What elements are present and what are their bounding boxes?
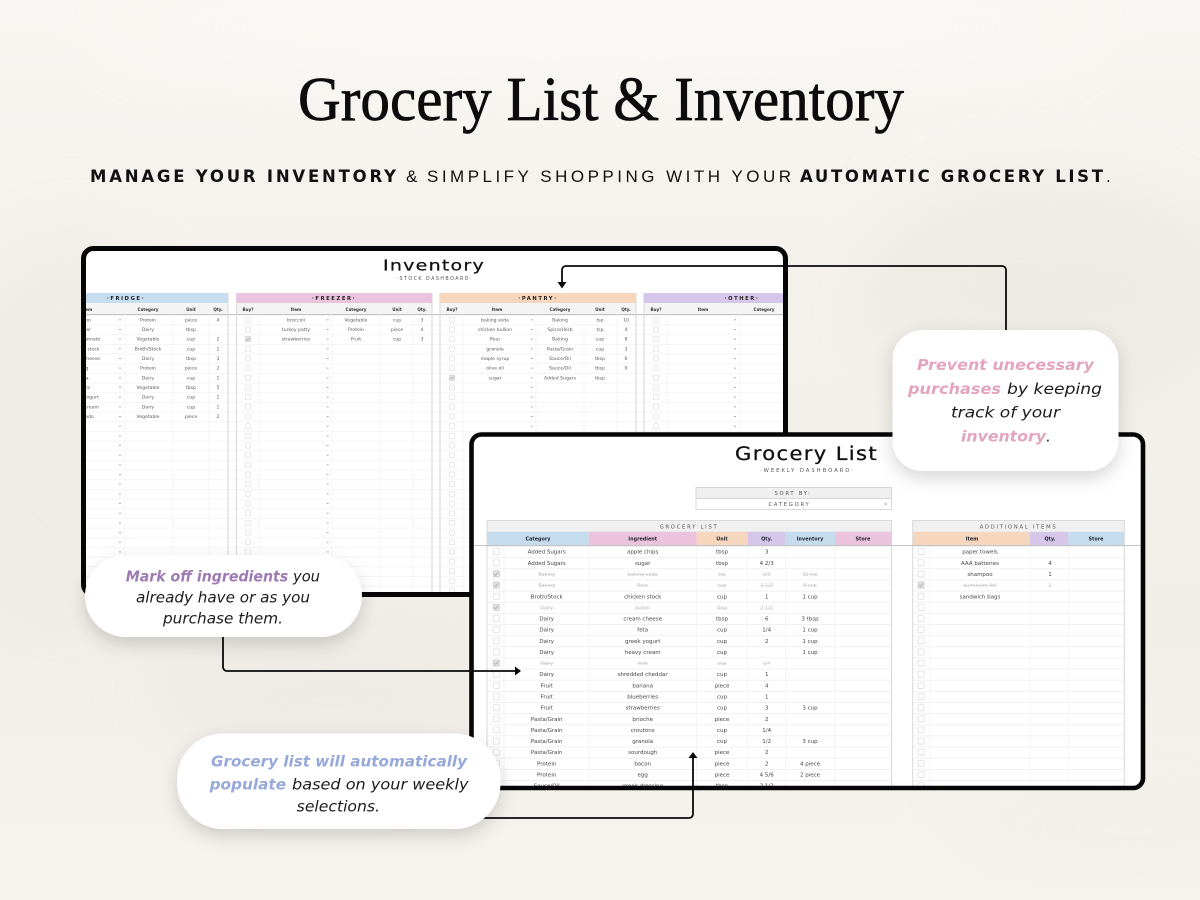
freezer table: Item	[291, 307, 301, 312]
grocery list table: 1/4	[762, 628, 772, 634]
additional items table: Item	[966, 536, 978, 542]
grocery heading	[736, 445, 876, 472]
callout: mark off ingredients: purchase them.	[162, 609, 283, 627]
pantry table: Item	[492, 307, 502, 312]
subtitle: .	[1106, 167, 1111, 186]
grocery list table: Fruit	[541, 706, 554, 712]
grocery list table: tbsp	[716, 550, 729, 556]
pantry table: 9	[625, 366, 628, 372]
grocery list table: Inventory	[797, 536, 824, 542]
pantry table: Spice/Herb	[547, 327, 573, 333]
callout: prevent unnecessary purchases: .	[1046, 428, 1051, 446]
freezer table: strawberries	[282, 337, 311, 343]
grocery list table: Dairy	[539, 628, 555, 634]
grocery list table: brioche	[632, 717, 654, 723]
freezer table: Qty.	[417, 307, 427, 312]
pantry table: Sauce/Oil	[549, 366, 571, 372]
grocery list table: Dairy	[539, 616, 555, 622]
fridge table: 1	[217, 346, 220, 352]
grocery list table: Protein	[537, 761, 557, 767]
grocery list table: 1 cup	[802, 650, 818, 656]
grocery list table: sugar	[635, 561, 651, 567]
fridge table: Item	[82, 307, 92, 312]
grocery list table: Qty.	[761, 536, 772, 542]
grocery list table: Dairy	[540, 605, 553, 611]
fridge table: piece	[185, 414, 197, 420]
subtitle: SIMPLIFY SHOPPING WITH YOUR	[427, 167, 791, 186]
fridge table: 2	[217, 414, 220, 420]
grocery list table: banana	[632, 683, 653, 689]
freezer table	[236, 293, 432, 343]
grocery list table: flour	[637, 583, 649, 589]
grocery list table: Broth/Stock	[531, 594, 564, 600]
grocery list table: sourdough	[628, 750, 658, 756]
additional items table: 1	[1048, 583, 1052, 589]
grocery list table: milk	[638, 661, 648, 667]
fridge table: Qty.	[213, 307, 223, 312]
grocery list table: 6	[765, 616, 769, 622]
fridge table: tbsp	[186, 356, 196, 362]
fridge table: Dairy	[142, 375, 154, 381]
grocery list table: 4 piece	[800, 761, 821, 767]
grocery list table: granola	[632, 739, 653, 745]
grocery list table	[487, 520, 892, 790]
fridge table: Protein	[140, 317, 156, 323]
fridge table: tbsp	[186, 385, 196, 391]
pantry table: baking soda	[481, 317, 509, 323]
inventory heading: ·STOCK DASHBOARD·	[396, 276, 472, 282]
fridge table: butter	[77, 327, 91, 333]
grocery list table: cup	[717, 672, 728, 678]
grocery list table: blueberries	[627, 694, 658, 700]
grocery list table: shredded cheddar	[618, 672, 668, 678]
pantry table: tsp	[596, 317, 604, 323]
fridge table: piece	[185, 317, 197, 323]
grocery list table: tbsp	[716, 784, 729, 790]
additional items table: shampoo	[967, 572, 993, 578]
grocery list table: Dairy	[539, 650, 555, 656]
grocery list table: egg	[638, 772, 648, 778]
other table	[644, 293, 783, 312]
additional items table: AAA batteries	[961, 561, 999, 567]
grocery list table: 1/4	[762, 728, 772, 734]
fridge table: Unit	[186, 307, 196, 312]
fridge table: Dairy	[142, 395, 154, 401]
other table: Category	[754, 307, 775, 312]
grocery list table: cup	[717, 694, 728, 700]
grocery list table: Protein	[537, 772, 557, 778]
grocery list table: 1	[765, 694, 768, 700]
grocery list table: piece	[715, 717, 730, 723]
callout: prevent unnecessary purchases: purchases	[907, 380, 1001, 398]
grocery list table: Dairy	[539, 639, 555, 645]
fridge table: Vegetable	[136, 385, 160, 391]
grocery list table: tsp	[718, 572, 726, 578]
freezer table: 3	[421, 337, 424, 343]
freezer table: turkey patty	[282, 327, 310, 333]
subtitle: AUTOMATIC GROCERY LIST	[800, 167, 1104, 186]
pantry table: Buy?	[446, 307, 458, 312]
additional items table: Store	[1089, 536, 1104, 542]
grocery list table: piece	[715, 750, 730, 756]
additional items table: aluminum foil	[963, 583, 997, 589]
title: Grocery List & Inventory	[298, 66, 904, 134]
freezer table: Buy?	[242, 307, 254, 312]
grocery list table: 2	[765, 639, 768, 645]
pantry table: Pasta/Grain	[547, 346, 573, 352]
pantry table: Baking	[552, 337, 568, 343]
panel: inventory dashboard	[68, 248, 786, 594]
grocery list table: 8 cup	[803, 583, 817, 589]
grocery list table: feta	[637, 628, 648, 634]
callout: prevent unnecessary purchases: by keeping	[1007, 380, 1102, 398]
additional items table: 4	[1048, 561, 1052, 567]
grocery list table: chicken stock	[624, 594, 662, 600]
callout: grocery list will populate: populate	[209, 775, 286, 793]
fridge table: 3	[217, 356, 220, 362]
grocery list table: 2	[765, 717, 768, 723]
pantry table: ·PANTRY·	[518, 296, 558, 302]
grocery list table: Fruit	[541, 683, 554, 689]
fridge table: Vegetable	[136, 337, 160, 343]
fridge table: 2	[217, 366, 220, 372]
pantry table: Sauce/Oil	[549, 356, 571, 362]
freezer table: ·FREEZER·	[312, 296, 356, 302]
panel: grocery list dashboard	[472, 434, 1144, 790]
pantry table: cup	[596, 347, 604, 352]
callout: prevent unnecessary purchases: track of your	[951, 404, 1062, 422]
callout: grocery list will populate: Grocery list will automatically	[211, 753, 468, 771]
grocery list table: tbsp	[716, 616, 729, 622]
pantry table: cup	[596, 338, 604, 343]
grocery list table: Baking	[538, 572, 555, 578]
fridge table: heavy cream	[69, 404, 99, 410]
grocery list table: Ingredient	[628, 536, 658, 542]
grocery list table: greek dressing	[622, 784, 663, 790]
fridge table: Protein	[140, 366, 156, 372]
pantry table: 8	[625, 337, 628, 343]
grocery list table: 2/3	[763, 572, 771, 578]
arrow: prevent callout to pantry	[558, 266, 1006, 335]
callout: prevent unnecessary purchases: Prevent unecessary	[917, 356, 1095, 374]
sort by control	[696, 488, 892, 510]
grocery list table: cup	[717, 650, 728, 656]
fridge table: Dairy	[142, 356, 154, 362]
grocery list table: greek yogurt	[625, 639, 661, 645]
grocery list table: Store	[856, 536, 871, 542]
freezer table: Vegetable	[344, 317, 368, 323]
grocery list table: cup	[718, 583, 726, 589]
grocery heading: ·WEEKLY DASHBOARD·	[760, 468, 853, 474]
subtitle	[90, 167, 1111, 186]
additional items table: Qty.	[1044, 536, 1056, 542]
freezer table: Category	[346, 307, 367, 312]
pantry table: 6	[625, 356, 628, 362]
grocery list table: 4 2/3	[760, 561, 774, 567]
grocery list table: Pasta/Grain	[531, 750, 563, 756]
fridge table: Dairy	[142, 327, 154, 333]
fridge table: 1	[217, 404, 220, 410]
additional items table: ADDITIONAL ITEMS	[980, 525, 1057, 531]
grocery list table: heavy cream	[625, 650, 661, 656]
fridge table: 5	[217, 385, 220, 391]
inventory heading: Inventory	[383, 256, 485, 274]
freezer table: cup	[393, 318, 401, 323]
grocery list table: bacon	[634, 761, 652, 767]
grocery list table: 1 1/3	[760, 583, 773, 589]
pantry table: Category	[550, 307, 571, 312]
other table: ·OTHER·	[725, 296, 759, 302]
grocery list table: piece	[715, 683, 730, 689]
grocery list table: piece	[715, 772, 730, 778]
grocery list table: 2	[765, 761, 768, 767]
grocery list table: 1 cup	[802, 639, 818, 645]
arrow: mark off callout to grocery rows	[223, 630, 521, 676]
grocery list table: Unit	[716, 536, 728, 542]
pantry table: tbsp	[595, 356, 605, 362]
additional items table: sandwich bags	[960, 594, 1000, 600]
pantry table: 10	[623, 317, 629, 323]
grocery list table: 2 1/2	[760, 784, 774, 790]
pantry table: tbsp	[595, 366, 605, 372]
callout: mark off ingredients: Mark off ingredients	[126, 568, 288, 586]
pantry table: tbsp	[595, 375, 605, 381]
additional items table: 1	[1048, 572, 1052, 578]
grocery list table: 1	[765, 672, 768, 678]
freezer table: Unit	[392, 307, 402, 312]
grocery list table: 1	[765, 594, 768, 600]
callout: mark off ingredients: you	[292, 568, 320, 586]
additional items table	[913, 520, 1124, 786]
fridge table: piece	[185, 366, 197, 372]
pantry table: tsp	[596, 327, 604, 333]
grocery list table: Added Sugars	[528, 550, 566, 556]
grocery list table: Dairy	[540, 661, 553, 667]
pantry table: sugar	[489, 375, 502, 381]
other table: Item	[698, 307, 708, 312]
grocery list table: cup	[717, 706, 728, 712]
fridge table: cherry tomato	[68, 337, 101, 343]
callout: grocery list will populate	[177, 734, 500, 829]
subtitle: MANAGE YOUR INVENTORY	[90, 167, 397, 186]
grocery list table: cup	[717, 594, 728, 600]
grocery list table: apple chips	[627, 550, 659, 556]
grocery list table: 3	[765, 706, 769, 712]
fridge table: feta	[79, 375, 89, 381]
freezer table: 3	[421, 317, 424, 323]
fridge table: ·FRIDGE·	[107, 296, 145, 302]
fridge table: cream cheese	[68, 356, 100, 362]
grocery list table: piece	[715, 761, 730, 767]
fridge table: cup	[187, 347, 195, 352]
inventory heading	[384, 259, 484, 280]
fridge table: cup	[187, 405, 195, 410]
additional items table: paper towels	[962, 550, 998, 556]
grocery list table: cup	[717, 628, 728, 634]
fridge table: greek yogurt	[69, 395, 99, 401]
fridge table: 1	[217, 395, 220, 401]
fridge table: tbsp	[186, 327, 196, 333]
other table: Buy?	[650, 307, 662, 312]
fridge table: Dairy	[142, 404, 154, 410]
freezer table: Protein	[348, 327, 364, 333]
sort by control: SORT BY:	[774, 491, 812, 497]
grocery list table: 4 5/6	[760, 772, 774, 778]
pantry table: granola	[486, 346, 504, 352]
grocery list table: 1 cup	[802, 594, 818, 600]
subtitle: &	[406, 167, 418, 186]
fridge table: Vegetable	[136, 414, 160, 420]
grocery list table: 3 tbsp	[801, 616, 819, 622]
grocery list table: croutons	[631, 728, 655, 734]
grocery list table: 10 tsp	[802, 572, 818, 578]
grocery list table: strawberries	[626, 706, 660, 712]
fridge table: avocado	[74, 414, 94, 420]
grocery list table: baking soda	[628, 572, 658, 578]
grocery list table: Baking	[538, 583, 555, 589]
grocery list table: 3	[765, 550, 769, 556]
fridge table: cup	[187, 338, 195, 343]
grocery list table: Category	[525, 536, 551, 542]
fridge table: egg	[80, 367, 88, 372]
freezer table: piece	[391, 327, 403, 333]
pantry table: flour	[490, 337, 500, 343]
grocery list table: 3 cup	[802, 739, 818, 745]
pantry table: olive oil	[486, 366, 504, 372]
grocery list table: cup	[717, 639, 728, 645]
grocery list table: butter	[635, 605, 651, 611]
grocery list table: tbsp	[716, 561, 729, 567]
fridge table: Category	[138, 307, 159, 312]
fridge table: bacon	[77, 317, 91, 323]
freezer table: Fruit	[351, 337, 361, 343]
grocery list table: cup	[718, 661, 726, 667]
callout: prevent unnecessary purchases	[892, 330, 1118, 471]
fridge table: chicken stock	[68, 346, 100, 352]
grocery list table: cream cheese	[623, 616, 663, 622]
grocery list table: GROCERY LIST	[660, 525, 718, 531]
sort by control: CATEGORY	[769, 502, 810, 508]
pantry table: Baking	[552, 317, 568, 323]
grocery list table: Fruit	[541, 694, 554, 700]
grocery list table: Dairy	[539, 672, 555, 678]
grocery heading: Grocery List	[735, 444, 878, 465]
fridge table: 2	[217, 337, 220, 343]
grocery list table: 1 cup	[802, 628, 818, 634]
pantry table: chicken bullion	[478, 327, 512, 333]
grocery list table: Pasta/Grain	[531, 739, 563, 745]
grocery list table: tbsp	[717, 605, 727, 611]
grocery list table: 3 cup	[802, 706, 818, 712]
callout: mark off ingredients: already have or as you	[136, 588, 310, 606]
fridge table: garlic	[78, 385, 91, 391]
fridge table	[86, 293, 228, 419]
grocery list table: Sauce/Oil	[534, 784, 560, 790]
pantry table	[440, 293, 636, 381]
fridge table: cup	[187, 396, 195, 401]
pantry table: 3	[625, 346, 628, 352]
arrow: populate callout to grocery list	[480, 752, 698, 818]
grocery list table: 1/2	[762, 739, 771, 745]
callout: grocery list will populate: selections.	[297, 798, 380, 816]
grocery list table: Pasta/Grain	[531, 728, 563, 734]
grocery list table: 2 1/2	[760, 605, 773, 611]
freezer table: 4	[421, 327, 424, 333]
grocery list table: 4	[765, 683, 769, 689]
callout: mark off ingredients	[85, 555, 362, 637]
fridge table: 4	[217, 317, 220, 323]
freezer table: broccoli	[287, 317, 305, 323]
pantry table: Qty.	[621, 307, 631, 312]
fridge table: 1	[217, 375, 220, 381]
grocery list table: 2 piece	[800, 772, 821, 778]
callout: grocery list will populate: based on your weekly	[292, 775, 469, 793]
grocery list table: cup	[717, 728, 728, 734]
pantry table: maple syrup	[481, 356, 509, 362]
grocery list table: 1/4	[763, 661, 771, 667]
pantry table: Added Sugars	[544, 375, 577, 381]
fridge table: cup	[187, 376, 195, 381]
pantry table: 4	[625, 327, 628, 333]
grocery list table: 2	[765, 750, 768, 756]
grocery list table: Pasta/Grain	[531, 717, 563, 723]
freezer table: cup	[393, 338, 401, 343]
grocery list table: Added Sugars	[528, 561, 566, 567]
callout: prevent unnecessary purchases: inventory	[961, 428, 1047, 446]
grocery list table: cup	[717, 739, 728, 745]
pantry table: Unit	[595, 307, 605, 312]
fridge table: Broth/Stock	[135, 346, 162, 352]
